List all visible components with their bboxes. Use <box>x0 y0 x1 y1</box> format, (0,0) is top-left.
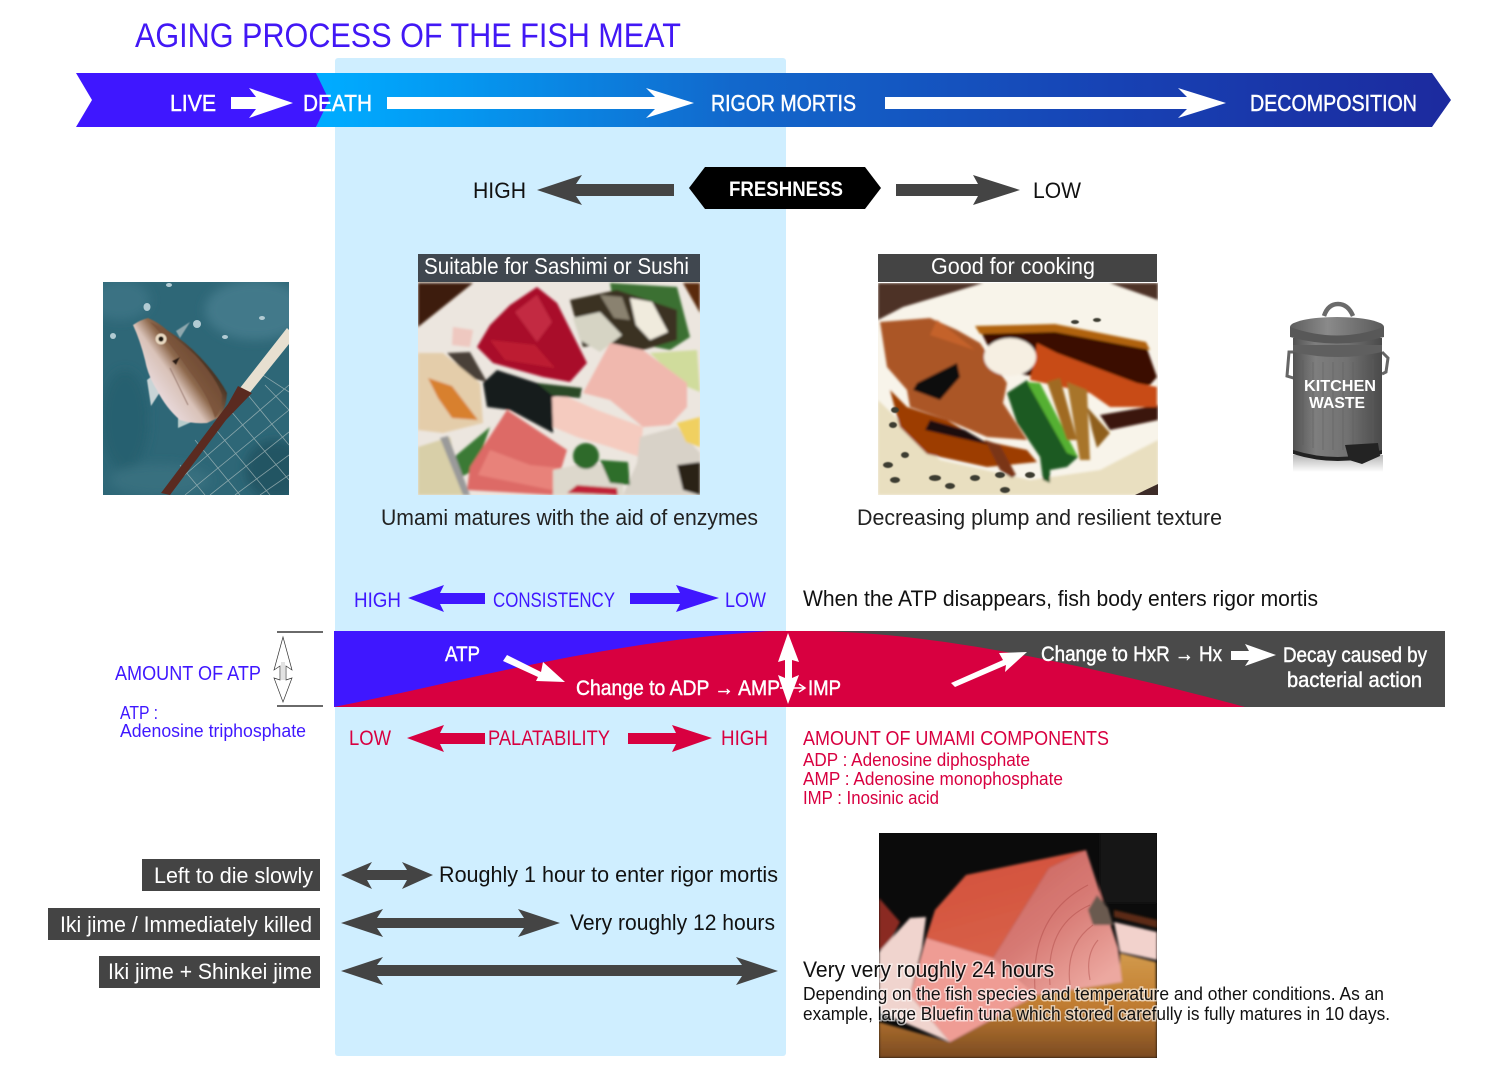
label: high freshness: HIGH <box>473 178 526 203</box>
photo: simmered fish with heading <box>878 253 1158 495</box>
text: conditions note: Depending on the fish species and temperature and other conditions. As an <box>803 984 1384 1004</box>
arrow: amp to imp <box>780 684 805 692</box>
arrow: toward high consistency <box>408 585 485 612</box>
label: change to adp amp: Change to ADP → AMP <box>576 677 780 700</box>
arrow: atp to adp <box>503 655 565 682</box>
definition: imp: IMP : Inosinic acid <box>803 788 939 808</box>
arrow: umami to decay <box>951 652 1027 687</box>
atp amount legend <box>115 632 323 741</box>
caption: umami matures: Umami matures with the aid of enzymes <box>381 505 758 530</box>
heading: suitable for sashimi or sushi: Suitable for Sashimi or Sushi <box>424 253 689 279</box>
arrow: toward low consistency <box>630 585 719 612</box>
label: kitchen waste: KITCHEN <box>1304 378 1376 395</box>
tag: left to die slowly: Left to die slowly <box>154 863 313 888</box>
text: twenty four hours: Very very roughly 24 hours <box>803 957 1054 982</box>
label: imp: IMP <box>808 677 841 700</box>
label: high consistency: HIGH <box>354 589 401 612</box>
badge: freshness: FRESHNESS <box>729 178 843 201</box>
tag: iki jime immediately killed: Iki jime / Immediately killed <box>60 912 312 937</box>
arrow: death to rigor mortis <box>387 88 694 118</box>
arrow: toward low palatability <box>407 725 485 752</box>
stage label: decomposition: DECOMPOSITION <box>1250 90 1417 116</box>
label: consistency: CONSISTENCY <box>493 589 615 612</box>
label: low freshness: LOW <box>1033 178 1081 203</box>
icon: kitchen waste bin <box>1287 304 1388 472</box>
label: decay caused by bacterial action: Decay caused by <box>1283 644 1427 667</box>
arrow: toward low <box>896 175 1020 205</box>
timing comparison <box>48 859 1390 1024</box>
text: twelve hours: Very roughly 12 hours <box>570 910 775 935</box>
photo: sashimi plate with heading <box>418 253 700 495</box>
label: palatability: PALATABILITY <box>488 727 610 750</box>
label: atp: ATP <box>445 643 480 666</box>
label: low palatability: LOW <box>349 727 391 750</box>
stage label: death: DEATH <box>303 90 372 116</box>
text: one hour: Roughly 1 hour to enter rigor mortis <box>439 862 778 887</box>
arrow: toward high palatability <box>628 725 712 752</box>
title: AGING PROCESS OF THE FISH MEAT <box>135 17 681 55</box>
definition: atp: Adenosine triphosphate <box>120 721 306 741</box>
label: change to hxr hx: Change to HxR → Hx <box>1041 643 1222 666</box>
definition: amp: AMP : Adenosine monophosphate <box>803 769 1063 789</box>
panel: light blue highlight column <box>335 58 786 1056</box>
caption: decreasing texture: Decreasing plump and resilient texture <box>857 505 1222 530</box>
icon: height double arrow <box>274 632 323 706</box>
arrow: twenty four hour span <box>341 957 778 985</box>
label: kitchen waste <box>1304 378 1376 412</box>
label: low consistency: LOW <box>725 589 766 612</box>
tag: iki jime and shinkei jime: Iki jime + Shinkei jime <box>108 959 312 984</box>
label: high palatability: HIGH <box>721 727 768 750</box>
chart: atp to umami to decay band <box>334 631 1445 707</box>
arrow: hx to decay <box>1231 644 1276 666</box>
arrow: toward high <box>537 175 674 205</box>
definition: atp: ATP : <box>120 703 158 723</box>
arrow: rigor mortis to decomposition <box>885 88 1226 118</box>
badge: freshness <box>689 167 881 209</box>
consistency scale <box>354 585 766 612</box>
photo: bluefin tuna block <box>879 833 1157 1058</box>
heading: amount of umami components: AMOUNT OF UMAMI COMPONENTS <box>803 728 1109 750</box>
heading: good for cooking: Good for cooking <box>931 253 1095 279</box>
label: kitchen waste: WASTE <box>1309 395 1365 412</box>
definition: atp <box>120 703 306 741</box>
definition: adp: ADP : Adenosine diphosphate <box>803 750 1030 770</box>
label: decay caused by bacterial action: bacterial action <box>1287 669 1422 692</box>
stage label: rigor mortis: RIGOR MORTIS <box>711 90 856 116</box>
arrow: peak double arrow <box>778 633 799 704</box>
text: conditions note: example, large Bluefin tuna which stored carefully is fully matures in 10 days. <box>803 1004 1390 1024</box>
arrow: live to death <box>231 88 293 118</box>
net <box>180 375 289 495</box>
stage label: live: LIVE <box>170 90 216 116</box>
freshness scale <box>473 167 1081 209</box>
umami components legend <box>803 728 1109 808</box>
text: conditions note <box>803 984 1390 1024</box>
arrow: twelve hour span <box>341 909 560 937</box>
label: decay caused by bacterial action <box>1283 644 1427 692</box>
heading: good for cooking <box>878 253 1157 282</box>
note: atp and rigor mortis: When the ATP disappears, fish body enters rigor mortis <box>803 586 1318 611</box>
photo: live fish in a landing net <box>103 282 289 495</box>
timeline banner <box>76 73 1451 127</box>
label: amount of atp: AMOUNT OF ATP <box>115 663 261 685</box>
palatability scale <box>349 725 768 752</box>
arrow: one hour span <box>341 862 433 889</box>
